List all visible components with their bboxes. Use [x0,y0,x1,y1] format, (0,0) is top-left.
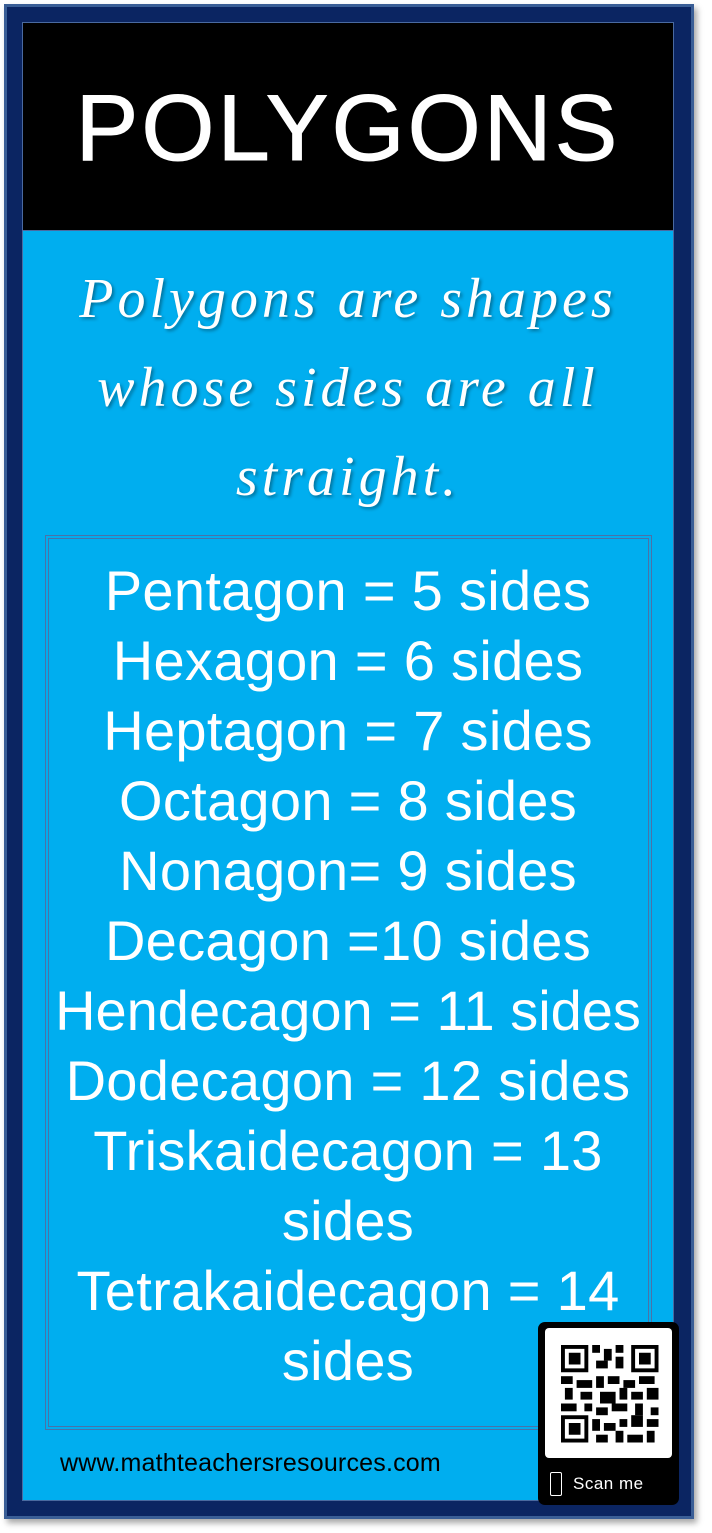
polygon list: Heptagon = 7 sides [103,699,593,762]
polygon list: Hexagon = 6 sides [113,629,583,692]
polygon list: Nonagon= 9 sides [119,839,577,902]
polygon list: Octagon = 8 sides [119,769,577,832]
definition text: Polygons are shapes [79,268,617,330]
polygon list [55,559,641,1392]
polygon list: Pentagon = 5 sides [105,559,591,622]
header [22,22,674,231]
polygon list: Decagon =10 sides [105,909,591,972]
icon: phone [550,1472,562,1496]
polygon list: Hendecagon = 11 sides [55,979,641,1042]
header: POLYGONS [76,75,620,180]
definition text: whose sides are all [97,357,599,419]
polygon list: Tetrakaidecagon = 14 [76,1259,620,1322]
polygon list: sides [282,1329,414,1392]
QR code [538,1322,679,1505]
polygon list: sides [282,1189,414,1252]
blue panel [22,231,674,1501]
definition text [78,268,617,511]
polygon list: Dodecagon = 12 sides [66,1049,630,1112]
website url: www.mathteachersresources.com [60,1449,441,1477]
definition text: straight. [236,446,460,508]
polygon list: Triskaidecagon = 13 [93,1119,603,1182]
scan me label: Scan me [573,1474,644,1493]
list box [45,535,652,1430]
